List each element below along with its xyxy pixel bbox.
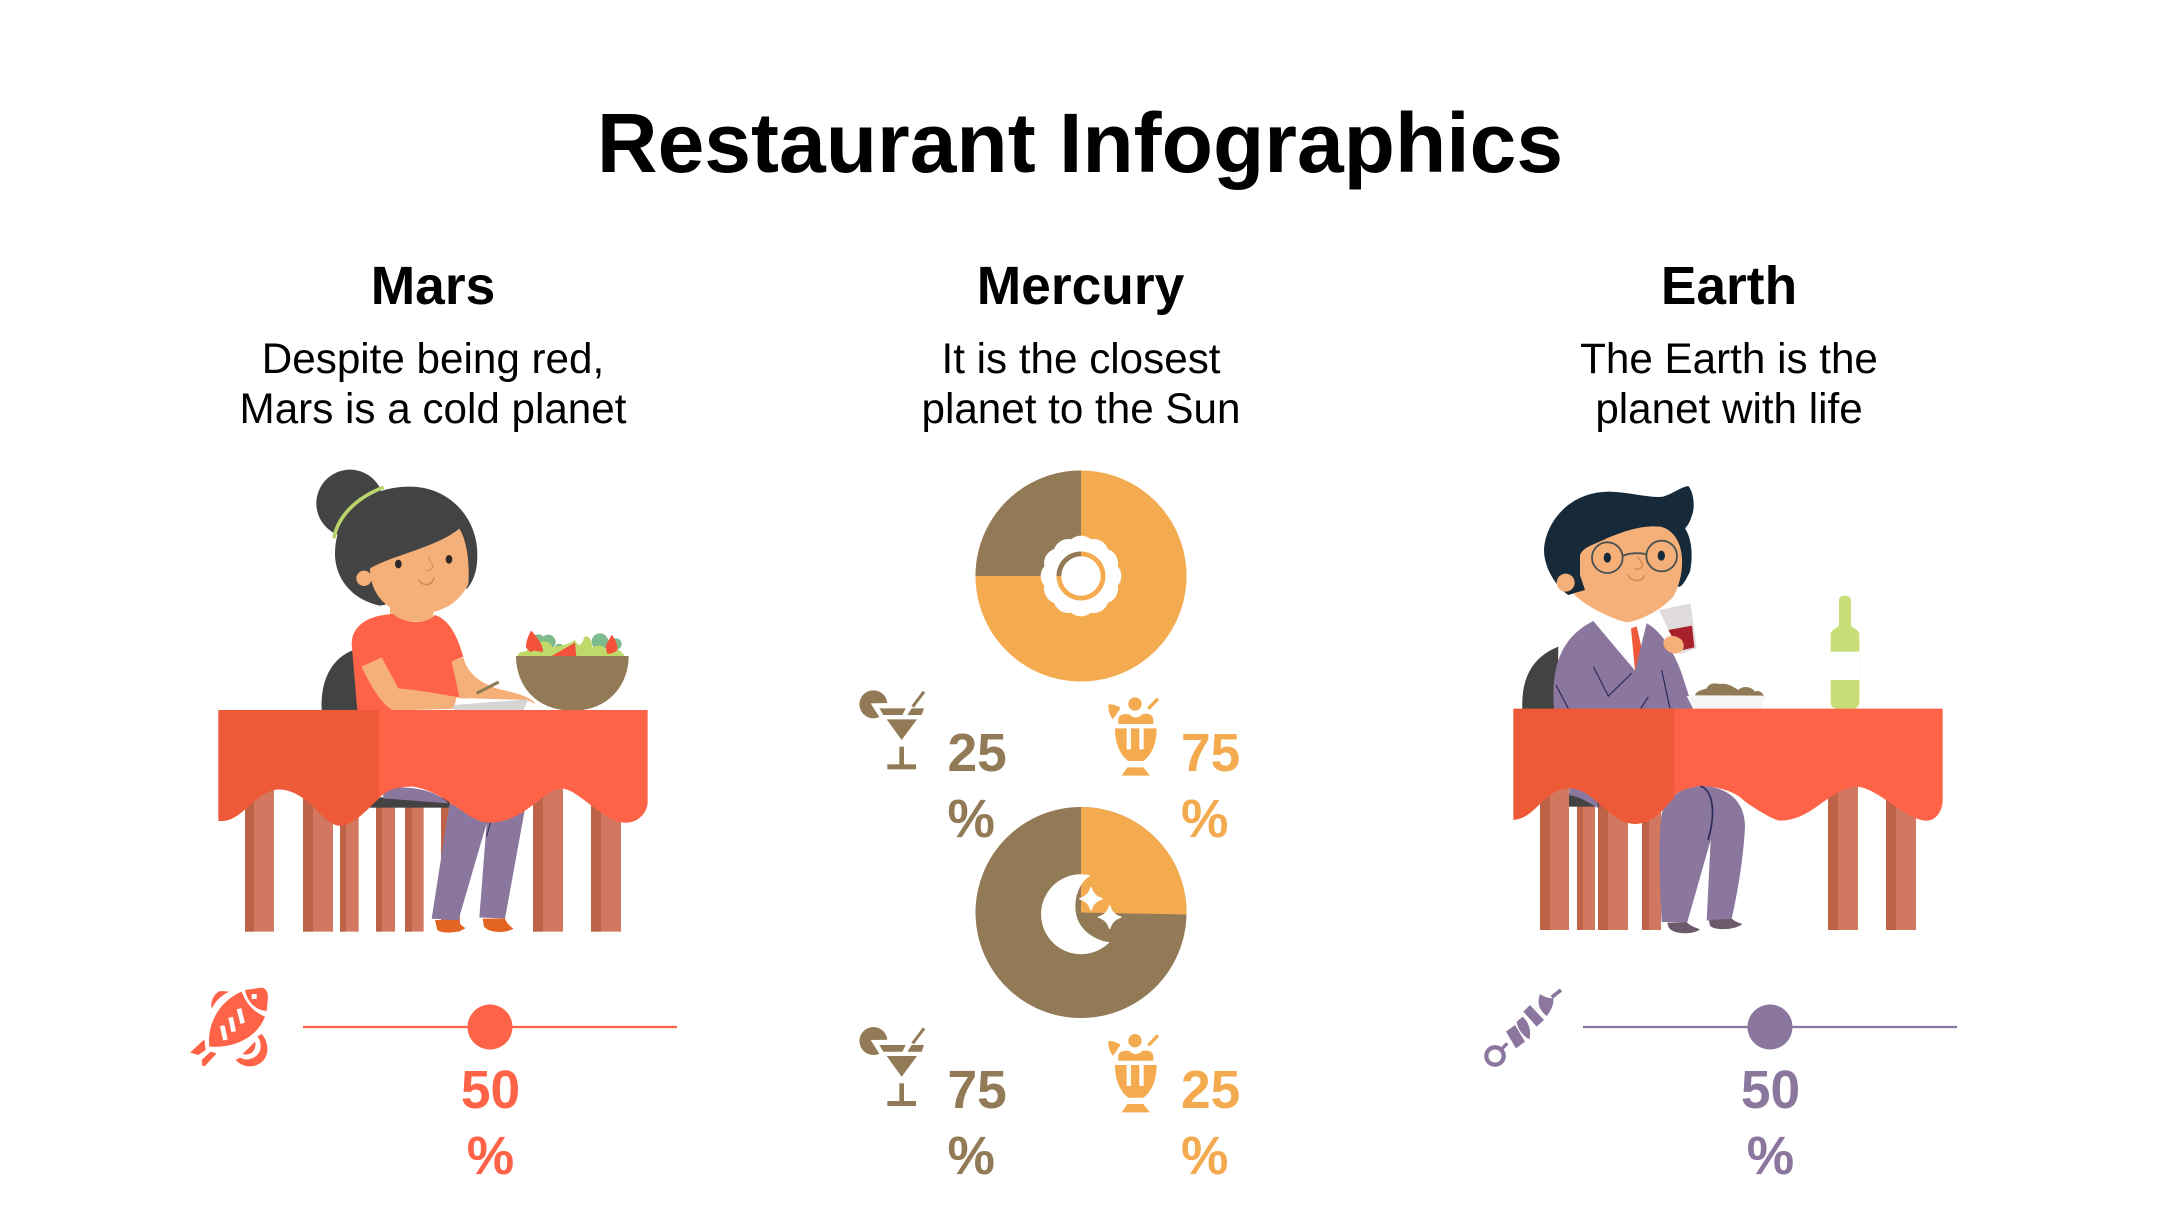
plate of food [1687,683,1767,709]
eyes [1604,551,1665,563]
tablecloth shaded side [1513,709,1674,824]
icon: sundae (bottom) [1108,1034,1158,1112]
chair [1522,647,1599,807]
fork [477,682,499,693]
trousers [383,788,526,920]
face [370,529,469,614]
shirt [352,614,463,711]
nose and smile [419,557,434,585]
icon: sun [1041,536,1121,616]
glass of wine [1659,603,1697,654]
illustration: man drinking wine at table [1513,486,1943,933]
value: sundae 25%: 25 [1181,1061,1240,1120]
value: cocktail 25%: 25 [948,724,1007,783]
text block: Earth description: planet with life [1595,385,1863,432]
value: cocktail 75%: 75 [948,1061,1007,1120]
eyes [395,555,452,568]
text block: Mercury description: It is the closest [941,335,1221,382]
heading: Earth: Earth [1661,257,1797,316]
slider: Mars 50% [303,1004,677,1050]
hand [1663,636,1684,653]
thigh behind cloth [1569,787,1598,808]
value: sundae 75%: % [1181,790,1228,849]
nose and smile [1628,557,1644,581]
value: cocktail 25%: % [948,790,995,849]
wine bottle [1831,596,1859,709]
title: Restaurant Infographics [597,96,1563,190]
shirt [1598,617,1647,671]
panel: Mars [190,257,677,1186]
value: sundae 75%: 75 [1181,724,1240,783]
face [1573,526,1682,622]
glasses [1592,541,1677,573]
socks [1667,919,1742,933]
text block: Mars description: Mars is a cold planet [240,385,627,432]
neck [390,603,433,622]
hair [1544,486,1694,595]
value: cocktail 75%: % [948,1127,995,1186]
icon: skewer [1486,990,1561,1065]
bowl [516,656,629,711]
table legs [245,787,621,932]
far arm [452,657,536,704]
value: Earth 50%: % [1747,1127,1794,1186]
tablecloth shaded side [218,710,379,826]
tie [1631,626,1644,671]
heading: Mercury: Mercury [977,257,1185,316]
text block: Mars description: Despite being red, [262,335,604,382]
panel: Mercury [859,257,1241,1186]
shoes [435,919,513,933]
tablecloth [1513,709,1943,821]
value: Mars 50%: 50 [461,1061,520,1120]
panel: Earth [1486,257,1957,1186]
jacket creases [1556,667,1670,709]
ear [356,571,372,586]
pie chart: night 75 / 25 [976,807,1187,1018]
hair band [334,487,384,538]
hair bun [316,470,384,537]
slider: Earth 50% [1583,1004,1957,1050]
icon: moon and stars [1041,874,1121,954]
text block: Mercury description: planet to the Sun [921,385,1241,432]
ear [1557,574,1575,592]
icon: cocktail (bottom) [859,1027,924,1106]
trousers [1660,786,1745,922]
value: Mars 50%: % [467,1127,514,1186]
salad [517,631,625,657]
table legs [1540,783,1916,930]
chair [322,650,450,808]
pie chart: day 25 / 75 [976,470,1186,682]
tablecloth [218,710,648,823]
heading: Mars: Mars [371,257,495,316]
icon: fish [190,988,268,1066]
icon: sundae (top) [1108,697,1158,776]
plate [453,699,528,711]
illustration: woman eating salad at table [218,470,648,933]
value: Earth 50%: 50 [1741,1061,1800,1120]
value: sundae 25%: % [1181,1127,1228,1186]
near arm [362,657,457,711]
icon: cocktail (top) [859,690,924,769]
jacket [1553,621,1693,709]
text block: Earth description: The Earth is the [1580,335,1878,382]
hair [335,487,477,606]
